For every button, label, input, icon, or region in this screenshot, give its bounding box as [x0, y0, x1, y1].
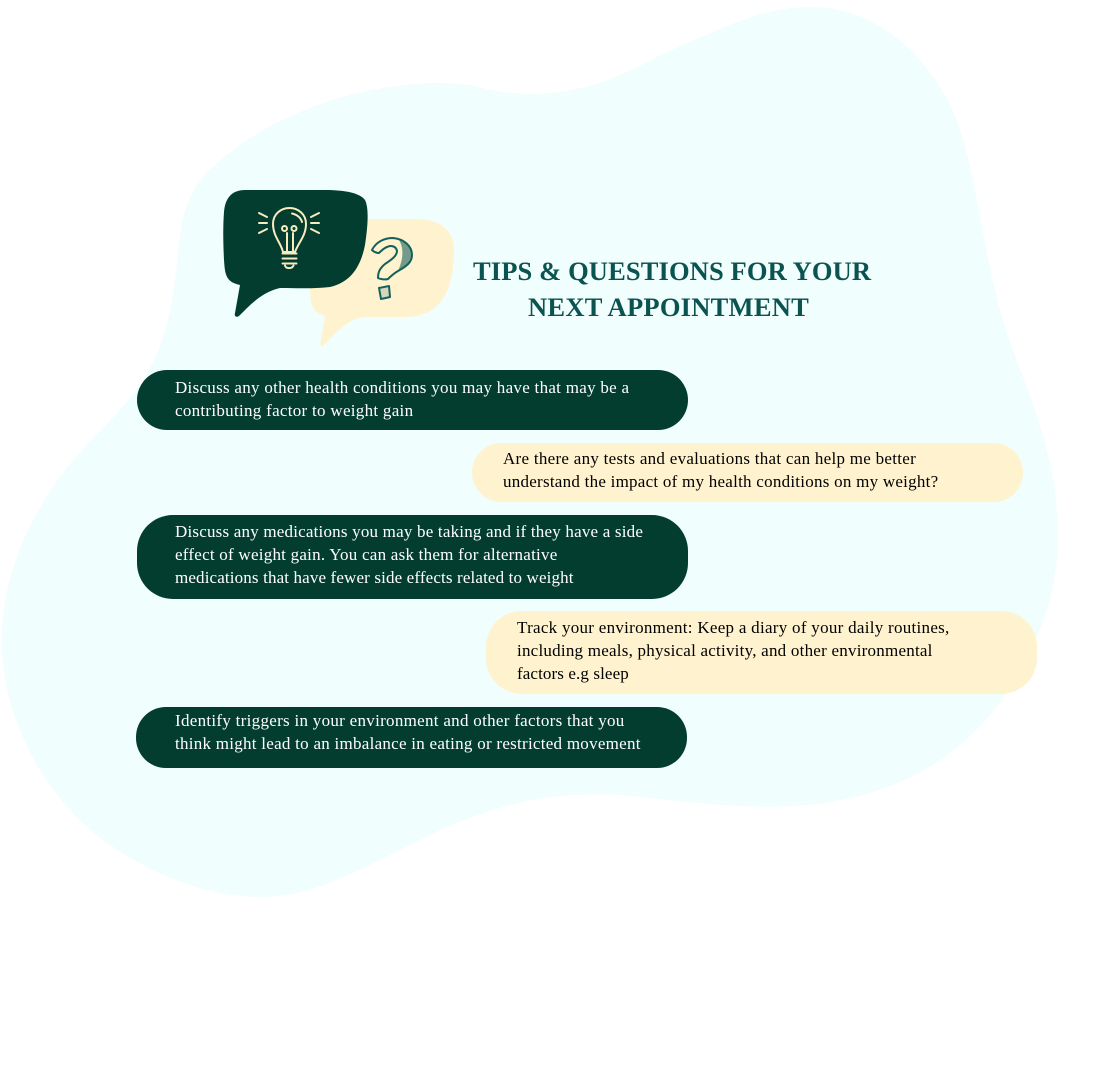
- icon: light bulb: [259, 208, 319, 268]
- icon: cream speech bubble: [310, 219, 454, 346]
- tip 1: contributing factor to weight gain: [175, 401, 413, 420]
- tip 3: including meals, physical activity, and other environmental: [517, 641, 933, 660]
- tip 1: Discuss any other health conditions you may have that may be a: [175, 378, 629, 397]
- tip 3: [486, 611, 1037, 694]
- tip 2: Discuss any medications you may be taking and if they have a side: [175, 522, 643, 541]
- tip 4: think might lead to an imbalance in eating or restricted movement: [175, 734, 641, 753]
- tip 2: effect of weight gain. You can ask them for alternative: [175, 545, 558, 564]
- tip 2: medications that have fewer side effects related to weight: [175, 568, 574, 587]
- tip 2: [137, 515, 688, 599]
- question 1: [472, 443, 1023, 502]
- tip 1: [137, 370, 688, 430]
- icon: question mark: [372, 238, 412, 299]
- icon: dark speech bubble: [223, 190, 368, 317]
- question 1: understand the impact of my health conditions on my weight?: [503, 472, 938, 491]
- icon: speech bubbles with light bulb and question mark: [223, 190, 454, 346]
- tip 3: Track your environment: Keep a diary of your daily routines,: [517, 618, 950, 637]
- title: [473, 256, 872, 322]
- title: TIPS & QUESTIONS FOR YOUR: [473, 256, 871, 286]
- tip 3: factors e.g sleep: [517, 664, 629, 683]
- title: NEXT APPOINTMENT: [528, 292, 809, 322]
- tip 4: [136, 707, 687, 768]
- tip 4: Identify triggers in your environment and other factors that you: [175, 711, 625, 730]
- question 1: Are there any tests and evaluations that can help me better: [503, 449, 916, 468]
